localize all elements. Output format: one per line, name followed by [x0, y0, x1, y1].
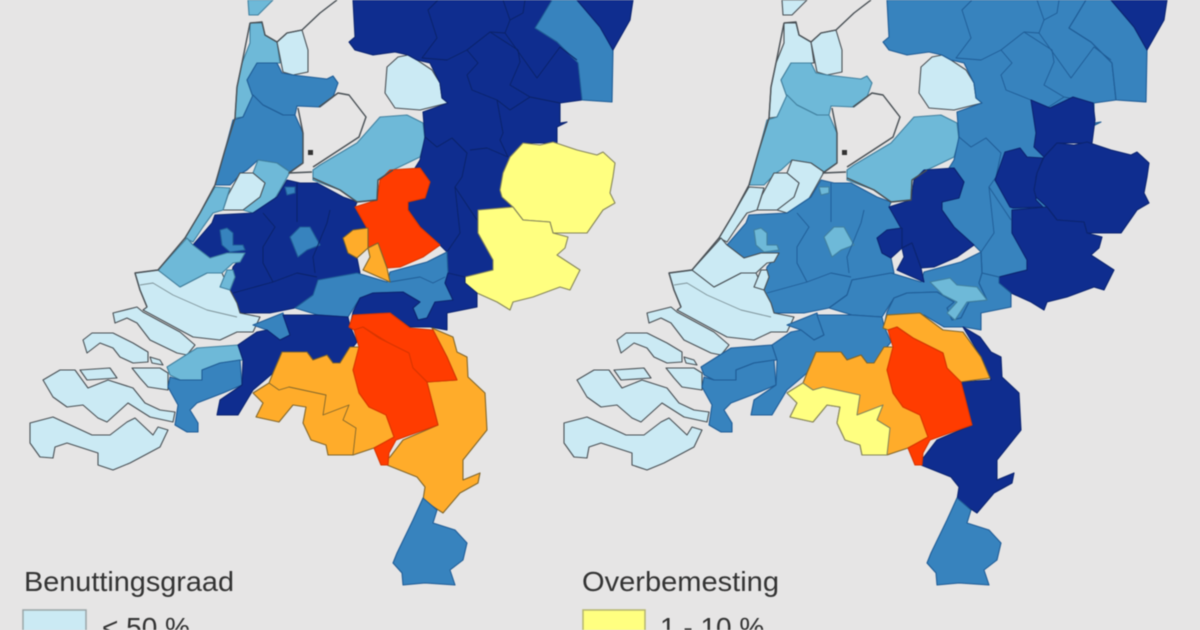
south-west regions — [30, 238, 357, 470]
Noord-Holland and Flevoland regions — [185, 0, 448, 242]
Brabant and Limburg regions — [787, 313, 1021, 585]
legend: benuttingsgraad — [23, 566, 234, 630]
central regions — [193, 168, 477, 330]
northern and eastern regions — [883, 0, 1167, 310]
northern and eastern regions — [349, 0, 633, 310]
map: overbemesting — [564, 0, 1167, 585]
coast lines and Markermeer shore — [135, 0, 393, 307]
legend title: Overbemesting — [582, 566, 779, 597]
Noord-Holland and Flevoland regions — [719, 0, 982, 242]
Brabant and Limburg regions — [253, 313, 487, 585]
legend swatch: below 50 percent — [23, 610, 86, 630]
legend swatch: 1 to 10 percent — [583, 610, 645, 630]
central regions — [727, 168, 1011, 330]
map: benuttingsgraad — [30, 0, 633, 585]
legend title: Benuttingsgraad — [24, 566, 234, 597]
south-west regions — [564, 238, 891, 470]
legend: overbemesting — [582, 566, 779, 630]
coast lines and Markermeer shore — [669, 0, 927, 307]
